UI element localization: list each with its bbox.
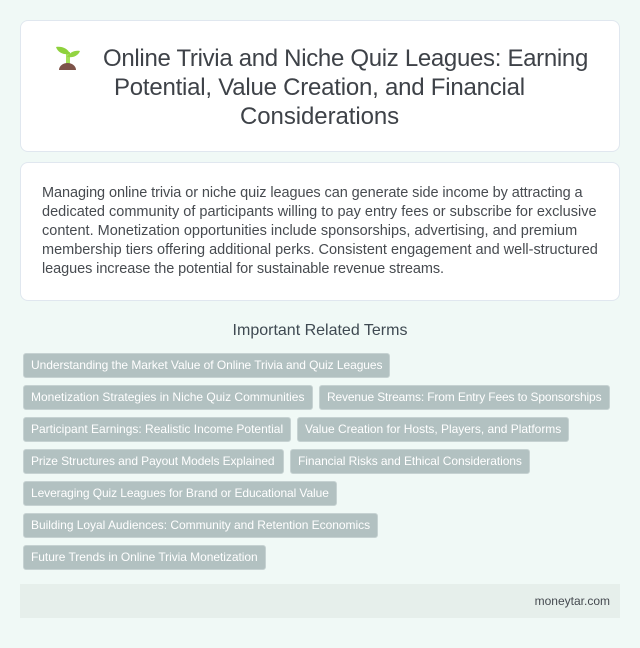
tag	[297, 417, 569, 442]
title: Considerations	[240, 103, 399, 130]
tag: Value Creation for Hosts, Players, and Platforms	[305, 422, 561, 436]
tag	[23, 481, 337, 506]
text block: summary paragraph: content. Monetization opportunities include sponsorships, advertising, and premium	[42, 223, 577, 239]
panel: summary text card	[20, 162, 620, 301]
tag	[319, 385, 610, 410]
icon: seedling	[56, 46, 80, 70]
footer text: source: moneytar.com	[535, 594, 610, 608]
tag: Leveraging Quiz Leagues for Brand or Educational Value	[31, 486, 329, 500]
tag: Financial Risks and Ethical Considerations	[298, 454, 522, 468]
footer bar	[20, 584, 620, 618]
text block: summary paragraph: membership tiers offering additional perks. Consistent engagement and well-structured	[42, 242, 598, 258]
title	[103, 45, 588, 130]
tag: Future Trends in Online Trivia Monetization	[31, 550, 258, 564]
tag: Participant Earnings: Realistic Income Potential	[31, 422, 283, 436]
text block: summary paragraph: leagues increase the potential for sustainable revenue streams.	[42, 261, 444, 277]
tag: Monetization Strategies in Niche Quiz Communities	[31, 390, 304, 404]
text block: summary paragraph: dedicated community of participants willing to pay entry fees or subscribe for exclusive	[42, 204, 597, 220]
tag	[23, 385, 313, 410]
text block: summary paragraph	[42, 185, 598, 277]
tag: Building Loyal Audiences: Community and Retention Economics	[31, 518, 370, 532]
tag	[23, 449, 284, 474]
tag	[23, 417, 291, 442]
tag: Prize Structures and Payout Models Explained	[31, 454, 275, 468]
title: Online Trivia and Niche Quiz Leagues: Earning	[103, 45, 588, 72]
panel: related term tags	[23, 353, 610, 570]
tag: Understanding the Market Value of Online Trivia and Quiz Leagues	[31, 358, 382, 372]
tag: Revenue Streams: From Entry Fees to Sponsorships	[327, 390, 601, 404]
heading: important related terms: Important Related Terms	[233, 322, 407, 339]
tag	[23, 513, 378, 538]
tag	[23, 545, 266, 570]
tag	[290, 449, 530, 474]
panel: title card	[20, 20, 620, 152]
text block: summary paragraph: Managing online trivia or niche quiz leagues can generate side income by attracting a	[42, 185, 583, 201]
tag	[23, 353, 390, 378]
title: Potential, Value Creation, and Financial	[114, 74, 525, 101]
